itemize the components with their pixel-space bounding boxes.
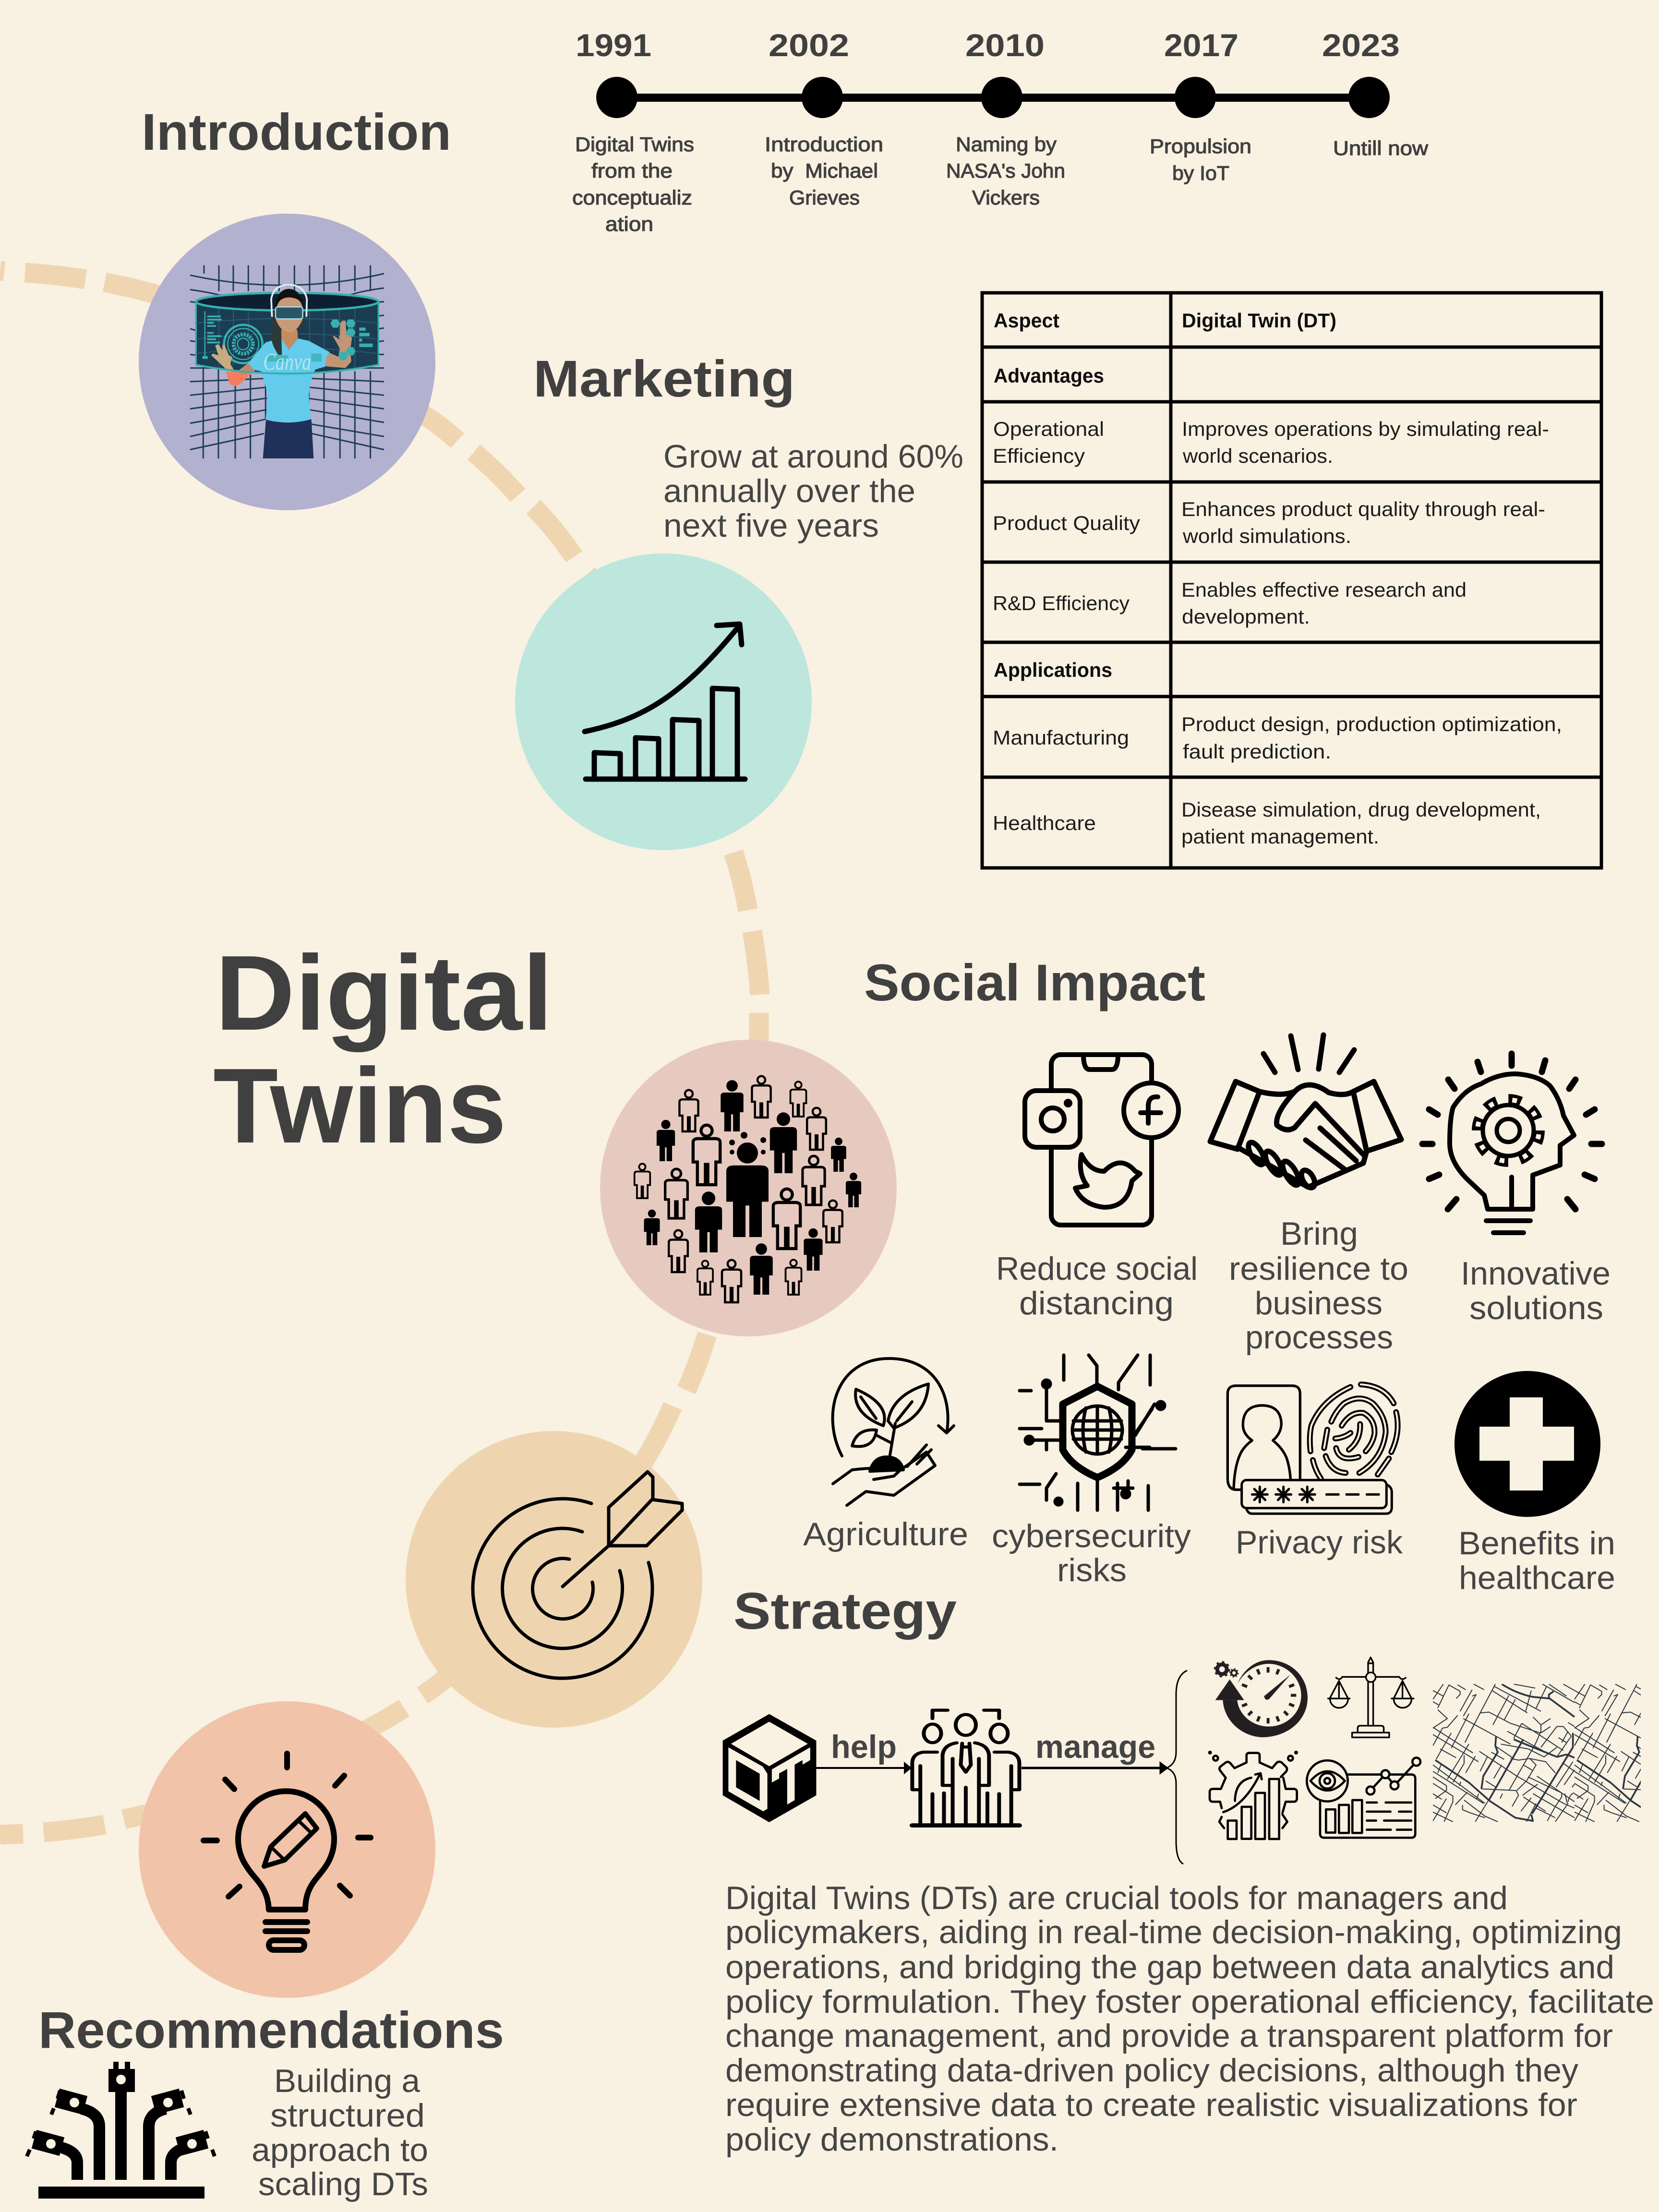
table: aspects bbox=[982, 293, 1601, 868]
timeline years: 2002 bbox=[769, 27, 849, 63]
label: Bring resilience: resilience to bbox=[1229, 1250, 1408, 1287]
table row: operational efficiency: Improves operations by simulating real- bbox=[1182, 418, 1549, 440]
icon: light bulb with pencil bbox=[204, 1754, 371, 1950]
table row: operational efficiency: world scenarios. bbox=[1182, 445, 1333, 467]
woman: hair back bbox=[271, 311, 303, 355]
table row: header: Digital Twin (DT) bbox=[1182, 309, 1336, 332]
label: Reduce social distancing: Reduce social bbox=[996, 1250, 1198, 1287]
table row: manufacturing: fault prediction. bbox=[1183, 740, 1331, 763]
woman: headband bbox=[271, 285, 307, 317]
strategy paragraph: policy formulation. They foster operational efficiency, facilitate bbox=[725, 1984, 1654, 2020]
timeline label 2002: by Michael bbox=[771, 159, 878, 182]
timeline label 2010: Vickers bbox=[972, 186, 1040, 209]
icon: analytics dashboard bbox=[1307, 1758, 1420, 1838]
screen panels on shirt bbox=[267, 354, 322, 361]
marketing text: next five years bbox=[663, 507, 879, 544]
icon: crowd of people bbox=[635, 1076, 861, 1302]
woman: face bbox=[276, 297, 302, 333]
title: Digital Twins: Twins bbox=[213, 1046, 506, 1166]
circle: marketing growth chart bbox=[515, 553, 812, 850]
table row: applications: Applications bbox=[994, 659, 1112, 681]
woman: neck bbox=[281, 330, 298, 349]
table row: header bbox=[994, 309, 1336, 332]
icon: gear with bars bbox=[1209, 1752, 1297, 1839]
circle: strategy target bbox=[406, 1431, 702, 1728]
timeline label 2017 bbox=[1150, 135, 1251, 184]
recommendations text bbox=[252, 2063, 428, 2202]
table row: advantages: Advantages bbox=[994, 364, 1104, 387]
timeline label 1991 bbox=[572, 133, 694, 235]
table row: R&D efficiency bbox=[993, 578, 1467, 628]
timeline label 2010 bbox=[946, 133, 1065, 209]
icon: city street map bbox=[1433, 1684, 1659, 1822]
strategy paragraph: change management, and provide a transparent platform for bbox=[725, 2018, 1613, 2054]
recommendations text: Building a bbox=[274, 2063, 420, 2099]
arrow: cube to managers bbox=[816, 1764, 910, 1772]
title: Digital Twins: Digital bbox=[215, 934, 553, 1053]
timeline label 1991: Digital Twins bbox=[575, 133, 694, 156]
VR woman illustration bbox=[190, 265, 384, 458]
table row: manufacturing: Product design, production optimization, bbox=[1181, 713, 1562, 735]
strategy diagram bbox=[723, 1658, 1659, 1864]
recommendations text: scaling DTs bbox=[258, 2166, 428, 2202]
timeline label 2002 bbox=[765, 133, 883, 209]
heading: Social Impact: Social Impact bbox=[864, 953, 1205, 1011]
label: Bring resilience bbox=[1229, 1215, 1408, 1356]
recommendations text: approach to bbox=[252, 2132, 428, 2168]
strategy paragraph: operations, and bridging the gap between data analytics and bbox=[725, 1949, 1614, 1985]
heading: Marketing: Marketing bbox=[533, 349, 795, 408]
timeline label 1991: conceptualiz bbox=[572, 186, 692, 209]
heading: Introduction: Introduction bbox=[142, 103, 451, 161]
timeline label 2002: Grieves bbox=[789, 186, 860, 209]
timeline label 2010: NASA's John bbox=[946, 159, 1065, 182]
timeline years: 2023 bbox=[1322, 27, 1400, 63]
label: Innovative solutions: Innovative bbox=[1461, 1255, 1611, 1292]
icon: DT cube bbox=[723, 1714, 816, 1822]
timeline axis bbox=[617, 94, 1369, 102]
icon: connected network chips bbox=[27, 2062, 215, 2199]
table row: header: Aspect bbox=[994, 309, 1059, 332]
timeline dots bbox=[596, 77, 1390, 118]
label: Reduce social distancing: distancing bbox=[1019, 1285, 1174, 1322]
icon: privacy risk bbox=[1227, 1384, 1398, 1514]
label: cybersecurity risks: risks bbox=[1057, 1552, 1127, 1588]
marketing text bbox=[663, 438, 963, 544]
strategy paragraph bbox=[725, 1880, 1654, 2158]
label: Agriculture: Agriculture bbox=[803, 1516, 968, 1552]
timeline label 1991: from the bbox=[591, 159, 673, 182]
watermark: Canva bbox=[263, 348, 311, 375]
wireframe grid bbox=[190, 265, 384, 458]
circle: social crowd bbox=[600, 1040, 897, 1336]
timeline label 2017: by IoT bbox=[1172, 162, 1229, 184]
label: Innovative solutions: solutions bbox=[1469, 1290, 1603, 1326]
dashed connector path bbox=[0, 271, 760, 1835]
timeline label 2017: Propulsion bbox=[1150, 135, 1251, 157]
title: Digital Twins bbox=[213, 934, 553, 1166]
strategy paragraph: require extensive data to create realistic visualizations for bbox=[725, 2087, 1577, 2123]
woman: hair top bbox=[275, 289, 303, 307]
timeline label 1991: ation bbox=[605, 213, 653, 235]
circle: introduction illustration bbox=[139, 214, 435, 510]
label: Benefits in healthcare bbox=[1458, 1525, 1615, 1596]
icon: balance scales bbox=[1328, 1658, 1414, 1737]
table row: operational efficiency bbox=[993, 418, 1549, 467]
timeline bbox=[572, 27, 1429, 235]
table row: product quality bbox=[993, 498, 1545, 547]
woman: visor bbox=[276, 307, 303, 319]
table row: healthcare: Healthcare bbox=[993, 812, 1096, 834]
icon: handshake bbox=[1210, 1035, 1401, 1190]
table row: product quality: Enhances product quality through real- bbox=[1181, 498, 1545, 520]
table row: healthcare bbox=[993, 798, 1541, 848]
table row: operational efficiency: Operational bbox=[993, 418, 1104, 440]
arrow: managers to outcomes bbox=[1022, 1764, 1166, 1772]
icon: team of managers bbox=[912, 1710, 1019, 1826]
label: Bring resilience: processes bbox=[1245, 1319, 1393, 1356]
HUD elements bbox=[203, 311, 373, 359]
table row: product quality: Product Quality bbox=[993, 512, 1140, 534]
woman: pants bbox=[263, 419, 313, 458]
woman: shirt bbox=[248, 337, 330, 422]
label: Bring resilience: business bbox=[1255, 1285, 1382, 1322]
label: Privacy risk: Privacy risk bbox=[1236, 1524, 1403, 1561]
label: Innovative solutions bbox=[1461, 1255, 1611, 1326]
icon: social media phone bbox=[1025, 1055, 1178, 1225]
marketing text: annually over the bbox=[663, 473, 915, 509]
strategy paragraph: Digital Twins (DTs) are crucial tools for managers and bbox=[725, 1880, 1508, 1916]
timeline label 2002: Introduction bbox=[765, 133, 883, 156]
table row: R&D efficiency: Enables effective research and bbox=[1181, 578, 1467, 601]
label: help: help bbox=[831, 1729, 897, 1765]
brace bbox=[1166, 1671, 1187, 1864]
table row: product quality: world simulations. bbox=[1182, 525, 1351, 547]
label: Benefits in healthcare: Benefits in bbox=[1458, 1525, 1615, 1562]
icon: healthcare cross bbox=[1455, 1371, 1600, 1517]
strategy paragraph: demonstrating data-driven policy decisions, although they bbox=[725, 2052, 1578, 2089]
icon: bar chart with arrow bbox=[585, 624, 745, 779]
icon: idea head with gear bbox=[1422, 1054, 1602, 1233]
table row: healthcare: patient management. bbox=[1181, 825, 1379, 848]
timeline label 2010: Naming by bbox=[956, 133, 1057, 156]
holographic band bbox=[196, 301, 378, 373]
woman: right arm bbox=[325, 321, 352, 368]
heading: Strategy: Strategy bbox=[733, 1582, 957, 1640]
timeline years: 1991 bbox=[576, 27, 651, 63]
icons group: outcomes bbox=[1209, 1658, 1420, 1839]
table row: manufacturing: Manufacturing bbox=[993, 726, 1129, 749]
recommendations text: structured bbox=[270, 2097, 425, 2134]
table row: manufacturing bbox=[993, 713, 1562, 763]
timeline years bbox=[576, 27, 1400, 63]
marketing text: Grow at around 60% bbox=[663, 438, 963, 475]
table row: R&D efficiency: development. bbox=[1182, 605, 1310, 628]
label: cybersecurity risks: cybersecurity bbox=[992, 1518, 1191, 1554]
label: manage: manage bbox=[1035, 1729, 1155, 1765]
icon: target with arrow bbox=[473, 1472, 682, 1678]
hologram lower rim bbox=[196, 365, 378, 373]
timeline years: 2010 bbox=[965, 27, 1045, 63]
circle: recommendations bulb bbox=[139, 1701, 435, 1998]
label: cybersecurity risks bbox=[992, 1518, 1191, 1588]
table row: R&D efficiency: R&D Efficiency bbox=[993, 592, 1130, 614]
timeline label 2023: Untill now bbox=[1333, 137, 1429, 159]
icon: agriculture bbox=[833, 1358, 954, 1505]
table row: healthcare: Disease simulation, drug development, bbox=[1181, 798, 1541, 821]
table row: operational efficiency: Efficiency bbox=[993, 445, 1085, 467]
hexagons over hand bbox=[338, 347, 356, 360]
heading: Recommendations: Recommendations bbox=[38, 2001, 504, 2059]
strategy paragraph: policy demonstrations. bbox=[725, 2121, 1058, 2158]
hologram top rim bbox=[196, 293, 378, 311]
icon: cybersecurity bbox=[1020, 1355, 1176, 1510]
icon: clock bbox=[1214, 1660, 1308, 1737]
woman: left arm bbox=[211, 344, 255, 386]
label: Reduce social distancing bbox=[996, 1250, 1198, 1322]
strategy paragraph: policymakers, aiding in real-time decision-making, optimizing bbox=[725, 1914, 1622, 1950]
timeline years: 2017 bbox=[1164, 27, 1238, 63]
label: Benefits in healthcare: healthcare bbox=[1459, 1560, 1615, 1596]
label: Bring resilience: Bring bbox=[1280, 1215, 1358, 1252]
woman: hair strand bbox=[271, 318, 282, 355]
